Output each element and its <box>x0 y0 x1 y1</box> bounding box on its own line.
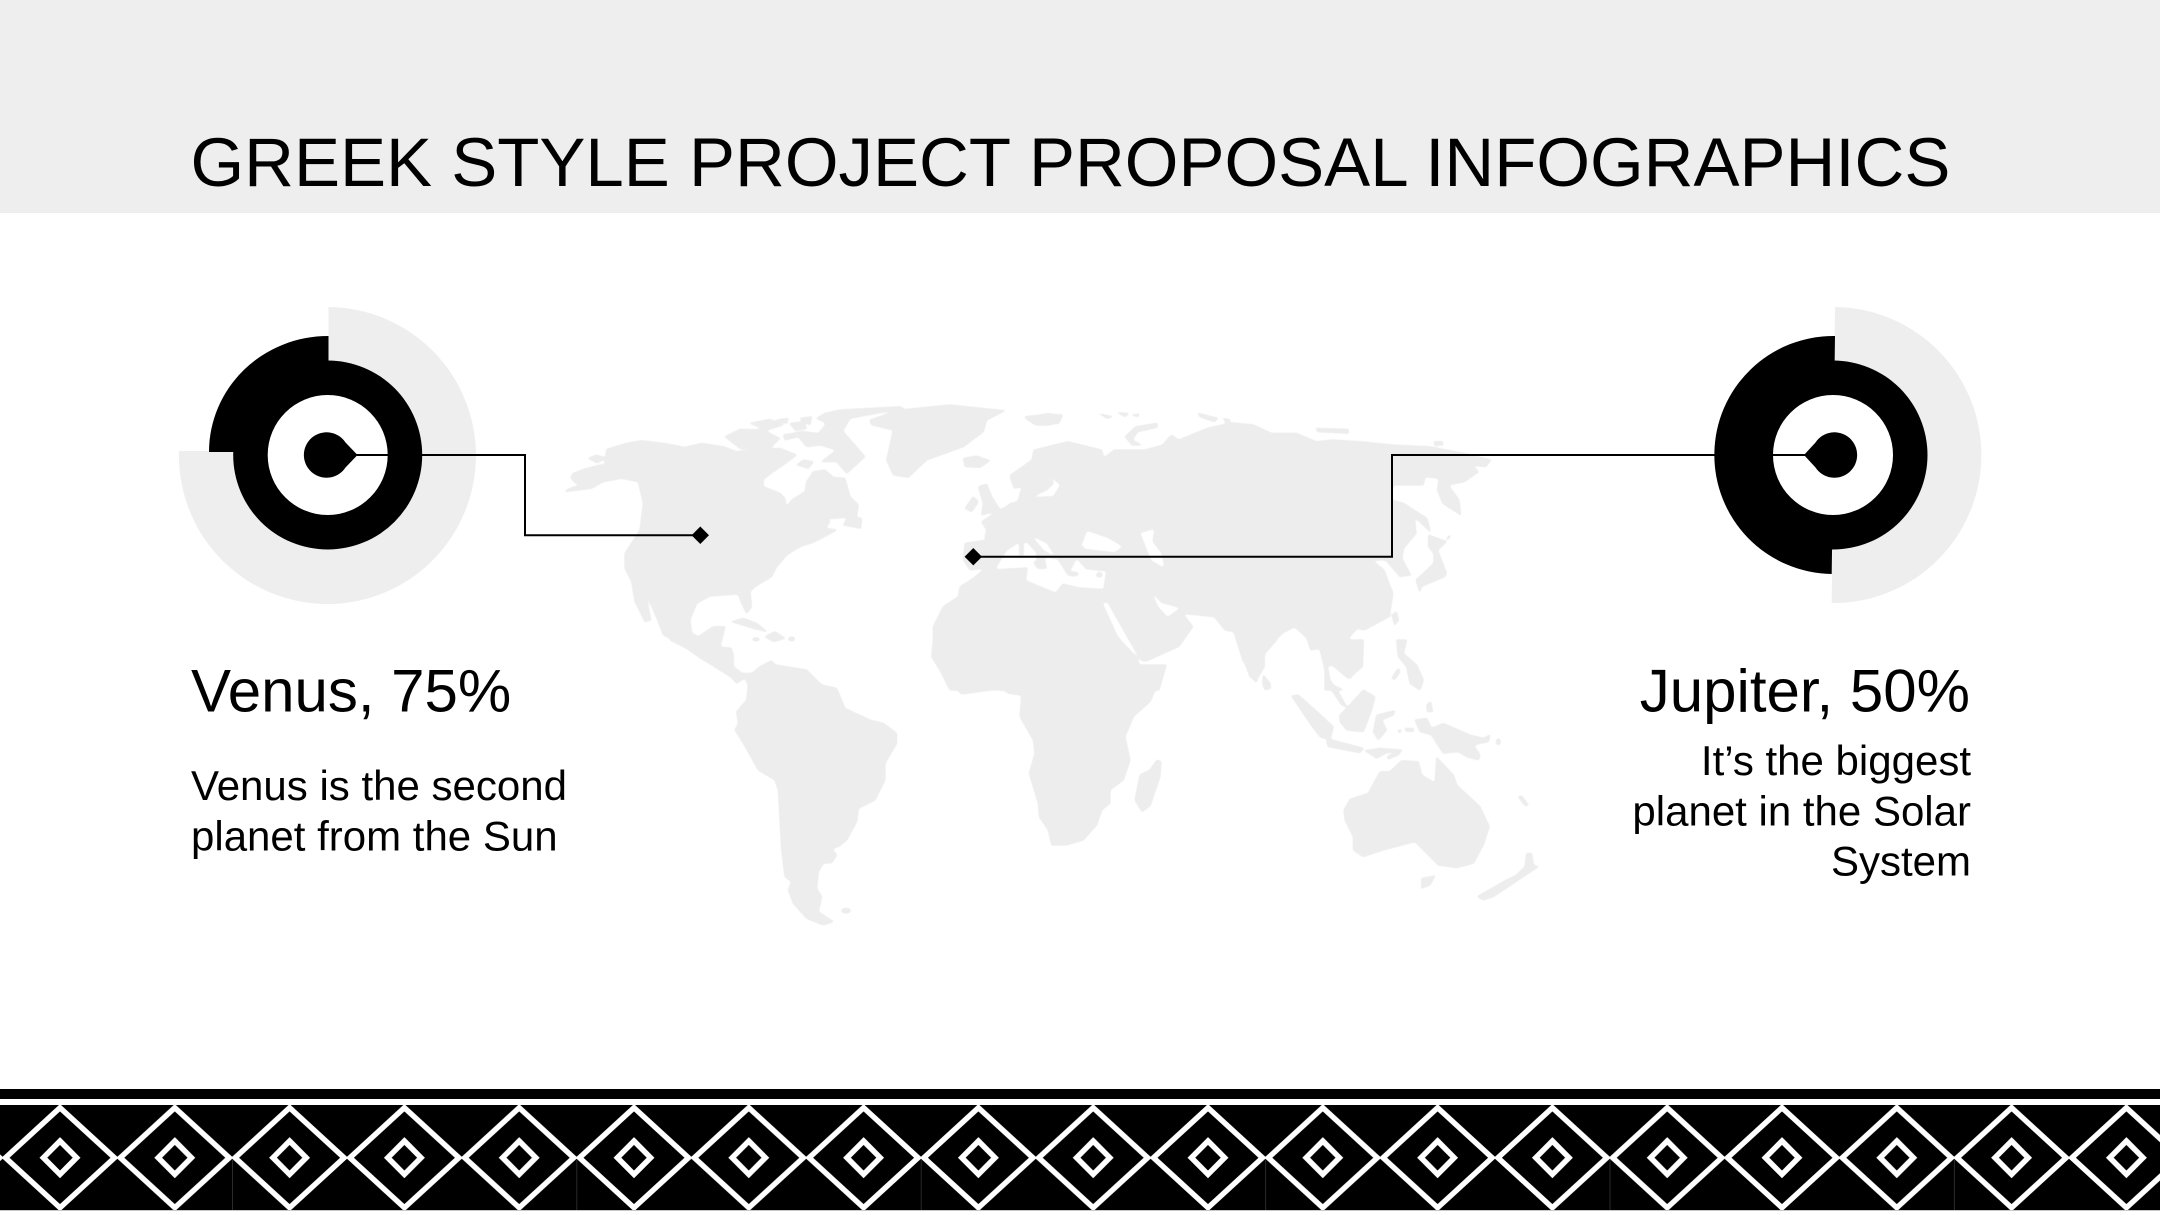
Venus description: planet from the Sun <box>191 812 558 859</box>
Venus donut chart, 75% <box>179 307 476 604</box>
Jupiter description: It’s the biggest <box>1701 737 1971 784</box>
Jupiter donut chart, 50% <box>1714 307 1981 603</box>
header band <box>0 0 2160 213</box>
Jupiter description: System <box>1831 838 1971 884</box>
Venus description: Venus is the second <box>191 762 567 809</box>
title: GREEK STYLE PROJECT PROPOSAL INFOGRAPHICS <box>190 124 1950 201</box>
Jupiter description: planet in the Solar <box>1632 787 1971 834</box>
Venus heading: Venus, 75% <box>191 658 511 724</box>
Jupiter connector line with diamond marker <box>965 455 1810 565</box>
Jupiter heading: Jupiter, 50% <box>1640 658 1970 724</box>
seas drawn in white over the land <box>997 530 1179 667</box>
Venus connector line with diamond marker <box>350 455 709 544</box>
world map <box>520 370 1580 950</box>
meander border <box>0 1089 2160 1211</box>
